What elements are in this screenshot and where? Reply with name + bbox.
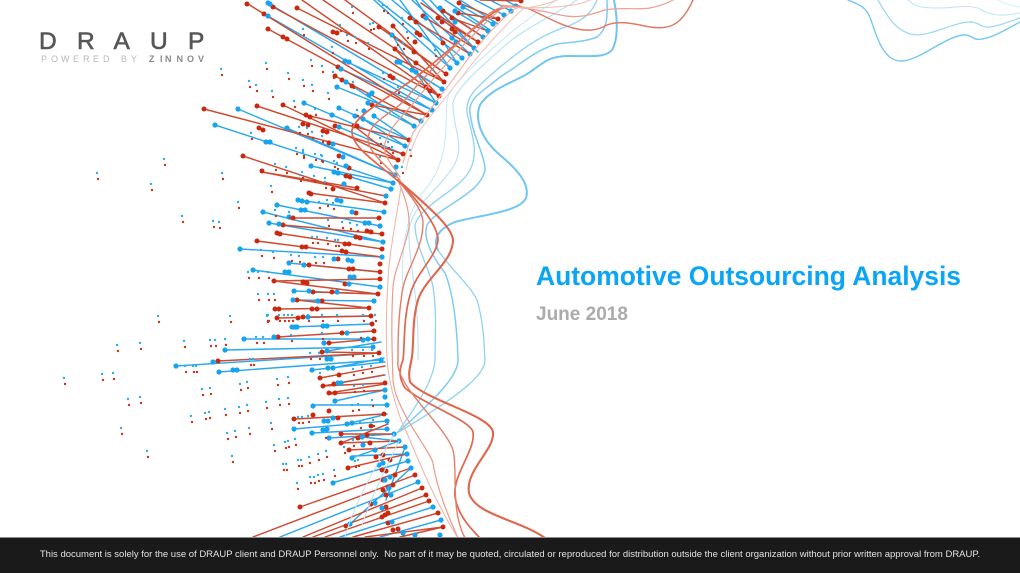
large dumbbell end dots, red (204, 1, 521, 530)
footer disclaimer bar (0, 537, 1020, 573)
title: Automotive Outsourcing Analysis (536, 261, 961, 291)
small paired dots, blue upper row (64, 5, 435, 483)
footer disclaimer bar: This document is solely for the use of DRAUP client and DRAUP Personnel only. No part of it may be quoted, circulated or reproduced for distribution outside the client organization without prior written approval from DRAUP. (40, 549, 980, 560)
logo: DRAUP powered by Zinnov: POWERED BY (41, 54, 137, 64)
blue flow curves (397, 0, 1020, 433)
small paired dots, red lower row (65, 11, 436, 489)
faint blue lines at the lower spine (345, 434, 399, 537)
red flow curves (352, 0, 693, 538)
logo: DRAUP powered by Zinnov: ZINNOV (149, 54, 204, 64)
logo: DRAUP powered by Zinnov: DRAUP (39, 28, 204, 55)
date: June 2018 (536, 304, 628, 325)
thin connector lines of the dumbbell fan (176, 0, 521, 537)
large dumbbell end dots, blue (176, 3, 516, 535)
